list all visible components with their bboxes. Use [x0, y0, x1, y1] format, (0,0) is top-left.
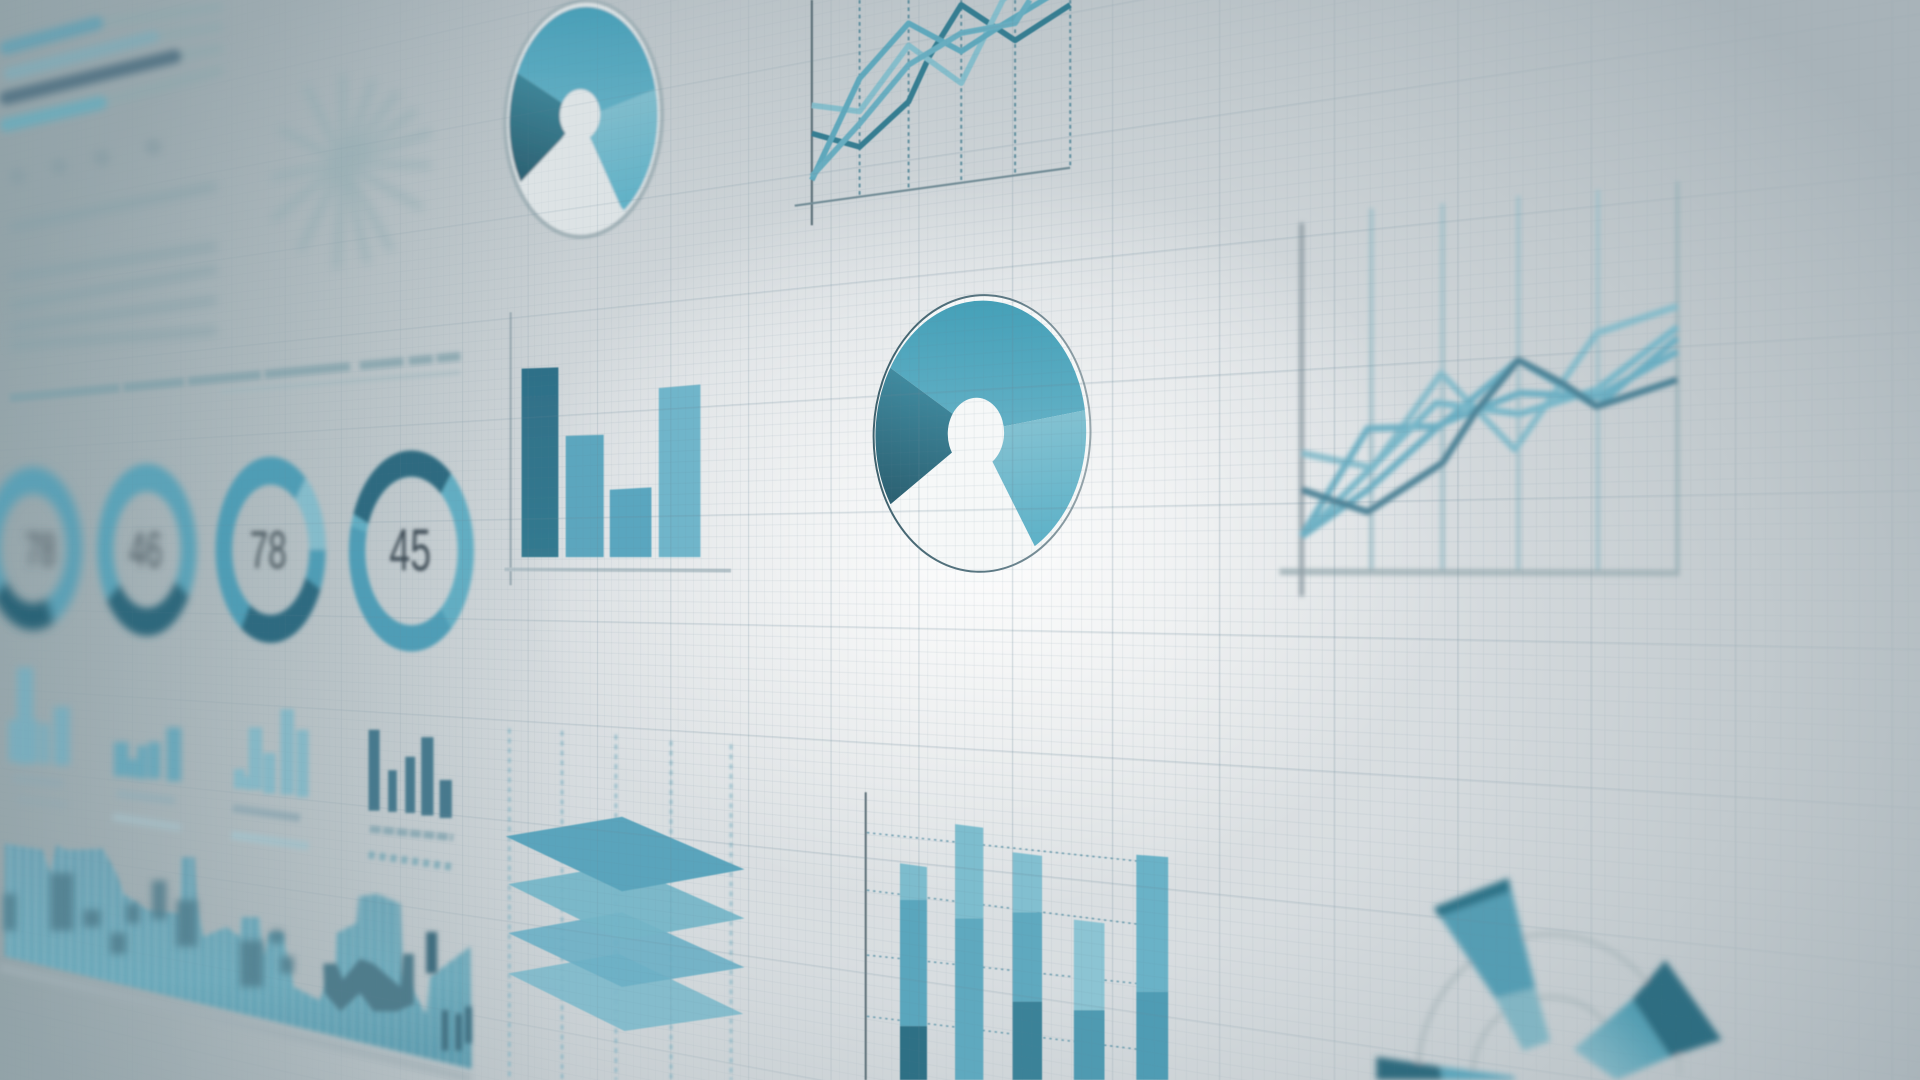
- mini chart 2: [114, 727, 181, 781]
- inner guide ring: [1473, 997, 1625, 1075]
- column 4: [1074, 920, 1104, 1080]
- grid columns: [1371, 181, 1678, 572]
- area bars: [5, 844, 471, 1069]
- mini bar charts: [9, 667, 453, 867]
- center donut outline: [868, 291, 1096, 576]
- donut 1: 78: [25, 526, 56, 577]
- bar 3: [6, 56, 175, 98]
- bar 3: [610, 487, 651, 557]
- area baseline: [0, 967, 471, 1079]
- starburst chart: [272, 73, 431, 269]
- dotted guide lines: [867, 833, 1169, 1053]
- left bar chart: [504, 312, 731, 585]
- top-left blurred bar list: [6, 7, 218, 125]
- wedge right: [1573, 960, 1722, 1080]
- dense area bar chart: [0, 844, 471, 1079]
- donut gauges: [0, 464, 466, 638]
- radial wedge chart: [1376, 878, 1722, 1080]
- teal series: [812, 0, 1049, 180]
- mini chart 3 captions: [231, 808, 309, 846]
- mini chart 1 captions: [13, 779, 67, 804]
- bar 2: [566, 435, 604, 557]
- layer 2: [508, 864, 744, 940]
- mini chart 2 captions: [113, 793, 181, 828]
- top donut outline: [500, 0, 667, 240]
- donut 4: [357, 464, 466, 638]
- faded bar tracks: [97, 7, 218, 103]
- layer 4: [508, 954, 743, 1031]
- blurred text block: [10, 186, 217, 345]
- mini chart 4 captions: [369, 829, 453, 867]
- segment dark: [508, 72, 566, 182]
- right line chart: [1280, 181, 1680, 596]
- center donut chart: [872, 294, 1092, 573]
- baseline: [504, 569, 731, 571]
- donut 2: 46: [129, 522, 162, 578]
- center donut segments: [875, 300, 1086, 546]
- segment dark: [875, 368, 952, 504]
- teal series: [1302, 306, 1678, 536]
- layer 1: [506, 817, 744, 891]
- axes: [795, 0, 1070, 225]
- top donut chart: [502, 0, 665, 240]
- segment light: [992, 410, 1086, 546]
- layer 3: [508, 912, 744, 987]
- column 5: [1136, 855, 1168, 1080]
- top donut segments: [508, 5, 660, 212]
- dashed columns: [860, 0, 1070, 197]
- mini chart 1: [9, 667, 70, 765]
- dark overlay bars: [4, 873, 294, 987]
- y axis: [1300, 223, 1303, 596]
- segment light: [589, 88, 660, 212]
- y axis: [865, 792, 867, 1080]
- bar 4: [6, 103, 100, 125]
- column 1: [900, 863, 927, 1080]
- donut 3: [224, 471, 317, 629]
- long caption band: [10, 356, 460, 398]
- segment top: [890, 300, 1085, 426]
- bar 1: [6, 23, 97, 48]
- tall dark bars: [426, 932, 471, 1051]
- mini chart 3: [234, 709, 309, 797]
- grouped column chart: [866, 792, 1169, 1080]
- dark series: [1302, 360, 1678, 512]
- guide ring: [1418, 934, 1680, 1075]
- segment top: [516, 5, 657, 112]
- column 2: [955, 824, 983, 1080]
- donut 4: 45: [389, 517, 431, 584]
- stacked plane chart: [506, 729, 744, 1080]
- dark series: [812, 5, 1070, 147]
- top line chart: [795, 0, 1070, 225]
- legend dots: [9, 138, 162, 185]
- bar 1: [522, 367, 558, 557]
- donut 2: [105, 478, 189, 622]
- donut 1: [0, 480, 74, 617]
- bar 4: [659, 384, 700, 557]
- wedge upper: [1434, 878, 1550, 1051]
- donut 3: 78: [250, 521, 287, 580]
- column 3: [1013, 852, 1042, 1080]
- mini chart 4: [369, 730, 452, 818]
- dashed gridlines: [509, 729, 731, 1080]
- x axis: [1280, 572, 1680, 573]
- axis: [510, 312, 512, 585]
- bar 2: [10, 37, 153, 73]
- dark silhouette bars: [323, 954, 414, 1011]
- wedge left: [1376, 1057, 1516, 1080]
